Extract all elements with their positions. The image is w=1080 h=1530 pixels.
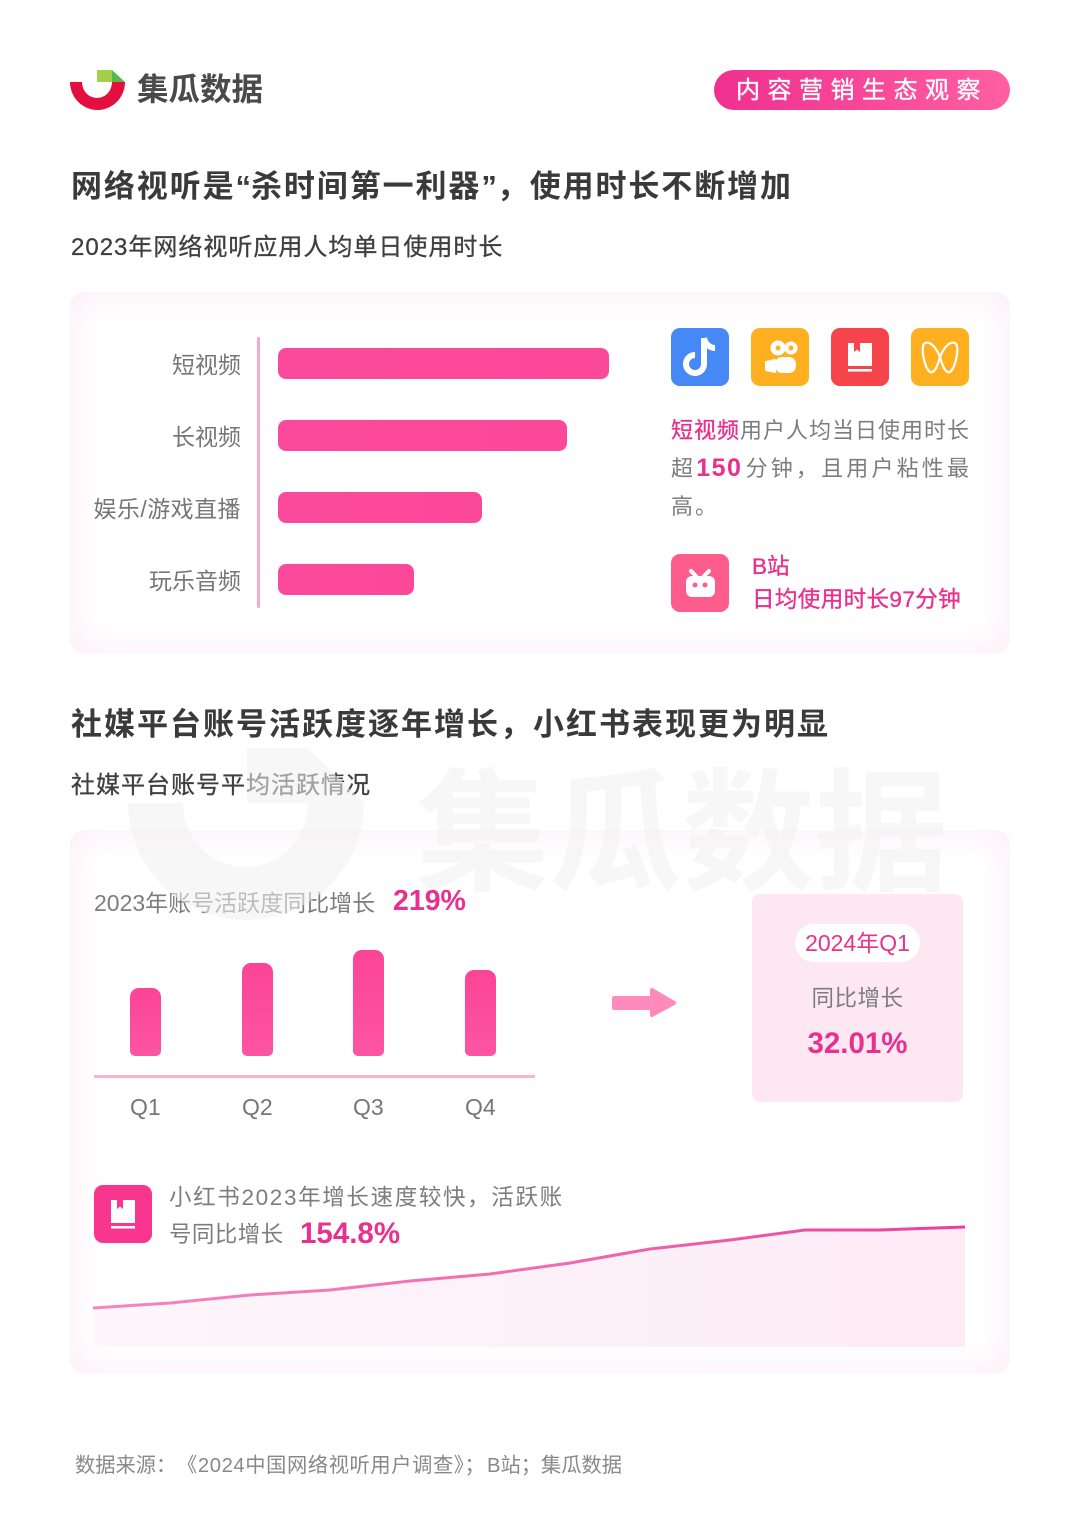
panel: 2024 Q1 growth: 32.01% xyxy=(807,1027,908,1060)
text: 2023 growth xyxy=(94,885,466,917)
source note: B站； xyxy=(487,1455,541,1477)
panel: video usage duration xyxy=(70,292,1010,653)
panel: 2024 Q1 growth: 同比增长 xyxy=(811,986,904,1011)
subheading: section 1: 2023年网络视听应用人均单日使用时长 xyxy=(71,234,503,261)
source note: 数据来源： xyxy=(75,1455,176,1477)
watermark xyxy=(171,761,948,914)
chart: daily usage bars: 长视频 xyxy=(172,424,241,450)
text: xiaohongshu callout xyxy=(169,1185,564,1250)
panel: social account activity xyxy=(70,830,1010,1373)
text: short video callout: 高。 xyxy=(671,494,719,519)
logo xyxy=(70,70,263,110)
source note xyxy=(75,1454,622,1477)
pill: 2024 Q1: 2024年Q1 xyxy=(805,930,910,956)
heading: section 1: 网络视听是“杀时间第一利器”，使用时长不断增加 xyxy=(71,169,793,204)
chart: quarterly bars: Q4 xyxy=(465,1094,496,1120)
text: 2023 growth: 219% xyxy=(393,885,466,917)
icon: xiaohongshu small xyxy=(94,1185,152,1243)
text: bilibili callout: B站 xyxy=(752,554,790,579)
text: short video callout xyxy=(671,418,970,519)
text: bilibili callout: 日均使用时长97分钟 xyxy=(752,587,961,612)
icon: bilibili xyxy=(671,554,729,612)
header pill: 内容营销生态观察 xyxy=(736,77,988,104)
header pill xyxy=(714,70,1010,110)
subheading: section 2: 社媒平台账号平均活跃情况 xyxy=(71,772,371,799)
text: xiaohongshu callout: 154.8% xyxy=(300,1217,400,1250)
text: short video callout: 150 xyxy=(696,454,742,482)
text: xiaohongshu callout: 号同比增长 xyxy=(169,1222,284,1247)
chart: quarterly bars: Q1 xyxy=(130,1094,161,1120)
chart: daily usage bars: 短视频 xyxy=(172,352,241,378)
source note: 《2024中国网络视听用户调查》； xyxy=(177,1455,485,1477)
chart: quarterly bars: Q2 xyxy=(242,1094,273,1120)
area chart: xiaohongshu growth xyxy=(92,1226,966,1347)
text: short video callout: 短视频用户人均当日使用时长 xyxy=(671,418,970,443)
heading: section 2: 社媒平台账号活跃度逐年增长，小红书表现更为明显 xyxy=(71,707,830,742)
chart: daily usage bars: 娱乐/游戏直播 xyxy=(93,496,241,522)
arrow xyxy=(612,988,676,1018)
chart: quarterly bars: Q3 xyxy=(353,1094,384,1120)
watermark: 集瓜数据 xyxy=(416,761,948,909)
icon: kuaishou xyxy=(751,328,809,386)
text: bilibili callout xyxy=(752,554,961,612)
pill: 2024 Q1 xyxy=(795,924,920,962)
text: xiaohongshu callout: 小红书2023年增长速度较快，活跃账 xyxy=(169,1185,564,1210)
logo: 集瓜数据 xyxy=(137,71,263,107)
panel: 2024 Q1 growth xyxy=(752,894,963,1102)
chart: daily usage bars: 玩乐音频 xyxy=(149,568,241,594)
text: short video callout: 超 分钟，且用户粘性最 xyxy=(671,456,969,481)
chart: daily usage bars xyxy=(93,337,609,608)
icon: xiaohongshu xyxy=(831,328,889,386)
icon: video account xyxy=(911,328,969,386)
icon: douyin xyxy=(671,328,729,386)
text: 2023 growth: 2023年账号活跃度同比增长 xyxy=(94,890,375,916)
chart: quarterly bars xyxy=(94,950,535,1120)
source note: 集瓜数据 xyxy=(541,1455,622,1477)
